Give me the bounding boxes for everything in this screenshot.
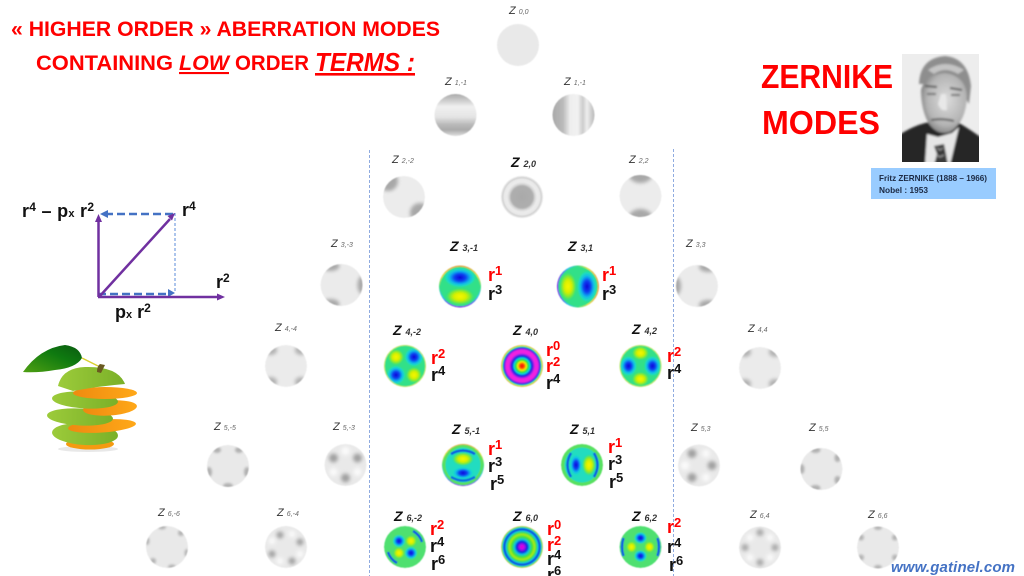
mode Z6,-6 bbox=[144, 524, 190, 570]
radial order terms: r bbox=[546, 340, 553, 360]
mode labels: Z 6,-2 bbox=[393, 508, 422, 524]
radial order terms: 4 bbox=[438, 363, 446, 378]
radial order terms: r bbox=[667, 517, 674, 537]
radial order terms: r bbox=[431, 348, 438, 368]
label: r4 minus px r2: x r bbox=[68, 201, 87, 221]
label: r4: 4 bbox=[189, 199, 196, 213]
mode labels: Z 4,-4 bbox=[274, 322, 297, 334]
mode labels: Z 1,-1 bbox=[563, 76, 586, 88]
radial order terms: r bbox=[488, 439, 495, 459]
mode Z6,0 bbox=[501, 526, 543, 568]
radial order terms: 3 bbox=[495, 454, 502, 469]
mode labels: Z 5,5 bbox=[808, 422, 829, 434]
mode labels: Z 6,-6 bbox=[157, 507, 180, 519]
mode labels: Z 3,3 bbox=[685, 238, 706, 250]
radial order terms bbox=[430, 263, 683, 576]
mode Z4,-4 bbox=[265, 345, 307, 387]
radial order terms: r bbox=[431, 365, 438, 385]
radial order terms: r bbox=[608, 454, 615, 474]
radial order terms: 3 bbox=[615, 452, 622, 467]
caption: Fritz Zernike bbox=[871, 168, 996, 199]
radial order terms: r bbox=[430, 536, 437, 556]
radial order terms: 0 bbox=[554, 517, 561, 532]
label: px r2: px r bbox=[115, 302, 144, 322]
mode Z5,5 bbox=[798, 447, 842, 491]
mode Z2,-2 bbox=[383, 176, 425, 218]
radial order terms: r bbox=[602, 265, 609, 285]
mode Z5,-5 bbox=[206, 445, 250, 489]
radial order terms: r bbox=[488, 456, 495, 476]
radial order terms: 2 bbox=[438, 346, 445, 361]
mode labels: Z 6,2 bbox=[631, 508, 657, 524]
label: r2: r bbox=[216, 272, 223, 292]
title: ORDER bbox=[235, 52, 309, 75]
title: TERMS : bbox=[315, 47, 415, 77]
zernike pyramid: gray modes bbox=[144, 24, 899, 570]
label: r4: r bbox=[182, 200, 189, 220]
radial order terms: 5 bbox=[497, 472, 504, 487]
radial order terms: r bbox=[488, 284, 495, 304]
mode Z5,-3 bbox=[324, 444, 366, 486]
radial order terms: 2 bbox=[554, 533, 561, 548]
mode labels: Z 5,3 bbox=[690, 422, 711, 434]
radial order terms: r bbox=[609, 472, 616, 492]
radial order terms: 1 bbox=[609, 263, 616, 278]
mode labels: Z 4,4 bbox=[747, 323, 768, 335]
radial order terms: r bbox=[431, 554, 438, 574]
heading: Zernike modes: ZERNIKE bbox=[761, 58, 893, 95]
mode Z6,-4 bbox=[265, 526, 307, 568]
mode labels: Z 2,2 bbox=[628, 154, 649, 166]
mode labels: Z 1,-1 bbox=[444, 76, 467, 88]
vector diagram bbox=[22, 199, 230, 322]
radial order terms: r bbox=[490, 474, 497, 494]
mode Z4,-2 bbox=[384, 345, 426, 387]
mode labels: Z 2,0 bbox=[510, 154, 536, 170]
mode labels: Z 4,0 bbox=[512, 322, 538, 338]
mode Z2,0 bbox=[501, 176, 543, 218]
mode Z5,1 bbox=[561, 444, 603, 486]
label: px r2: 2 bbox=[144, 301, 151, 315]
title: « HIGHER ORDER » ABERRATION MODES bbox=[11, 18, 440, 41]
radial order terms: 4 bbox=[553, 371, 561, 386]
mode Z5,-1 bbox=[442, 444, 484, 486]
radial order terms: 0 bbox=[553, 338, 560, 353]
mode labels: Z 3,-3 bbox=[330, 238, 353, 250]
label: r4 minus px r2: 2 bbox=[87, 200, 94, 214]
radial order terms: 1 bbox=[495, 437, 502, 452]
radial order terms: 1 bbox=[495, 263, 502, 278]
radial order terms: 5 bbox=[616, 470, 623, 485]
mode labels: Z 5,-1 bbox=[451, 421, 480, 437]
radial order terms: 4 bbox=[554, 547, 562, 562]
mode Z0,0 bbox=[497, 24, 539, 66]
mode labels: Z 3,1 bbox=[567, 238, 593, 254]
radial order terms: r bbox=[667, 363, 674, 383]
mode labels bbox=[157, 5, 888, 524]
mode Z6,6 bbox=[857, 525, 899, 570]
mode labels: Z 6,-4 bbox=[276, 507, 299, 519]
radial order terms: r bbox=[547, 535, 554, 555]
mode labels: Z 4,2 bbox=[631, 321, 657, 337]
radial order terms: r bbox=[608, 437, 615, 457]
website credit: www.gatinel.com bbox=[891, 559, 1015, 576]
caption: Fritz Zernike: Fritz ZERNIKE (1888 – 1966) bbox=[879, 173, 987, 183]
radial order terms: r bbox=[546, 356, 553, 376]
mode labels: Z 6,4 bbox=[749, 509, 770, 521]
label: r4 minus px r2: – p bbox=[36, 201, 68, 221]
label: r4 minus px r2: r bbox=[22, 201, 29, 221]
mode Z6,-2 bbox=[384, 526, 426, 568]
radial order terms: 1 bbox=[615, 435, 622, 450]
mode Z6,2 bbox=[620, 526, 662, 568]
mode Z3,-1 bbox=[439, 266, 481, 308]
label: r2: 2 bbox=[223, 271, 230, 285]
radial order terms: r bbox=[602, 284, 609, 304]
radial order terms: 4 bbox=[437, 534, 445, 549]
mode Z1,-1 bbox=[434, 94, 476, 136]
radial order terms: r bbox=[546, 373, 553, 393]
radial order terms: 4 bbox=[674, 535, 682, 550]
radial order terms: r bbox=[547, 519, 554, 539]
radial order terms: 2 bbox=[674, 344, 681, 359]
zernike pyramid: coloured higher order modes bbox=[384, 266, 662, 568]
title: LOW bbox=[179, 52, 231, 75]
radial order terms: r bbox=[667, 346, 674, 366]
radial order terms: r bbox=[667, 537, 674, 557]
mode Z4,0 bbox=[501, 345, 543, 387]
radial order terms: 2 bbox=[674, 515, 681, 530]
mode Z4,4 bbox=[739, 347, 781, 389]
radial order terms: 6 bbox=[438, 552, 445, 567]
mode labels: Z 6,6 bbox=[867, 509, 888, 521]
mode Z2,2 bbox=[620, 174, 662, 218]
label: r4 minus px r2: 4 bbox=[29, 200, 36, 214]
radial order terms: 6 bbox=[676, 553, 683, 568]
radial order terms: 3 bbox=[609, 282, 616, 297]
heading: Zernike modes: MODES bbox=[762, 104, 880, 141]
mode Z6,4 bbox=[739, 526, 781, 568]
mode Z3,1 bbox=[557, 266, 599, 308]
mode Z3,-3 bbox=[320, 264, 363, 306]
radial order terms: r bbox=[547, 549, 554, 569]
divider lines bbox=[370, 149, 674, 576]
title: CONTAINING bbox=[36, 52, 173, 75]
radial order terms: 3 bbox=[495, 282, 502, 297]
mode Z3,3 bbox=[676, 264, 718, 307]
mode labels: Z 4,-2 bbox=[392, 322, 421, 338]
mode labels: Z 5,-5 bbox=[213, 421, 236, 433]
heading: Zernike modes bbox=[761, 58, 893, 141]
mode Z1,1 bbox=[552, 94, 594, 136]
icon: sliced apple and orange bbox=[23, 345, 137, 452]
mode Z4,2 bbox=[620, 345, 662, 387]
portrait: Fritz Zernike bbox=[902, 54, 979, 162]
mode labels: Z 0,0 bbox=[508, 5, 529, 17]
caption: Fritz Zernike: Nobel : 1953 bbox=[879, 185, 928, 195]
radial order terms: 2 bbox=[437, 517, 444, 532]
radial order terms: r bbox=[430, 519, 437, 539]
mode labels: Z 3,-1 bbox=[449, 238, 478, 254]
title bbox=[11, 18, 440, 77]
mode labels: Z 5,-3 bbox=[332, 421, 355, 433]
radial order terms: r bbox=[669, 555, 676, 575]
radial order terms: 4 bbox=[674, 361, 682, 376]
mode labels: Z 5,1 bbox=[569, 421, 595, 437]
mode labels: Z 2,-2 bbox=[391, 154, 414, 166]
mode labels: Z 6,0 bbox=[512, 508, 538, 524]
radial order terms: r bbox=[488, 265, 495, 285]
radial order terms: 2 bbox=[553, 354, 560, 369]
mode Z5,3 bbox=[678, 444, 720, 486]
